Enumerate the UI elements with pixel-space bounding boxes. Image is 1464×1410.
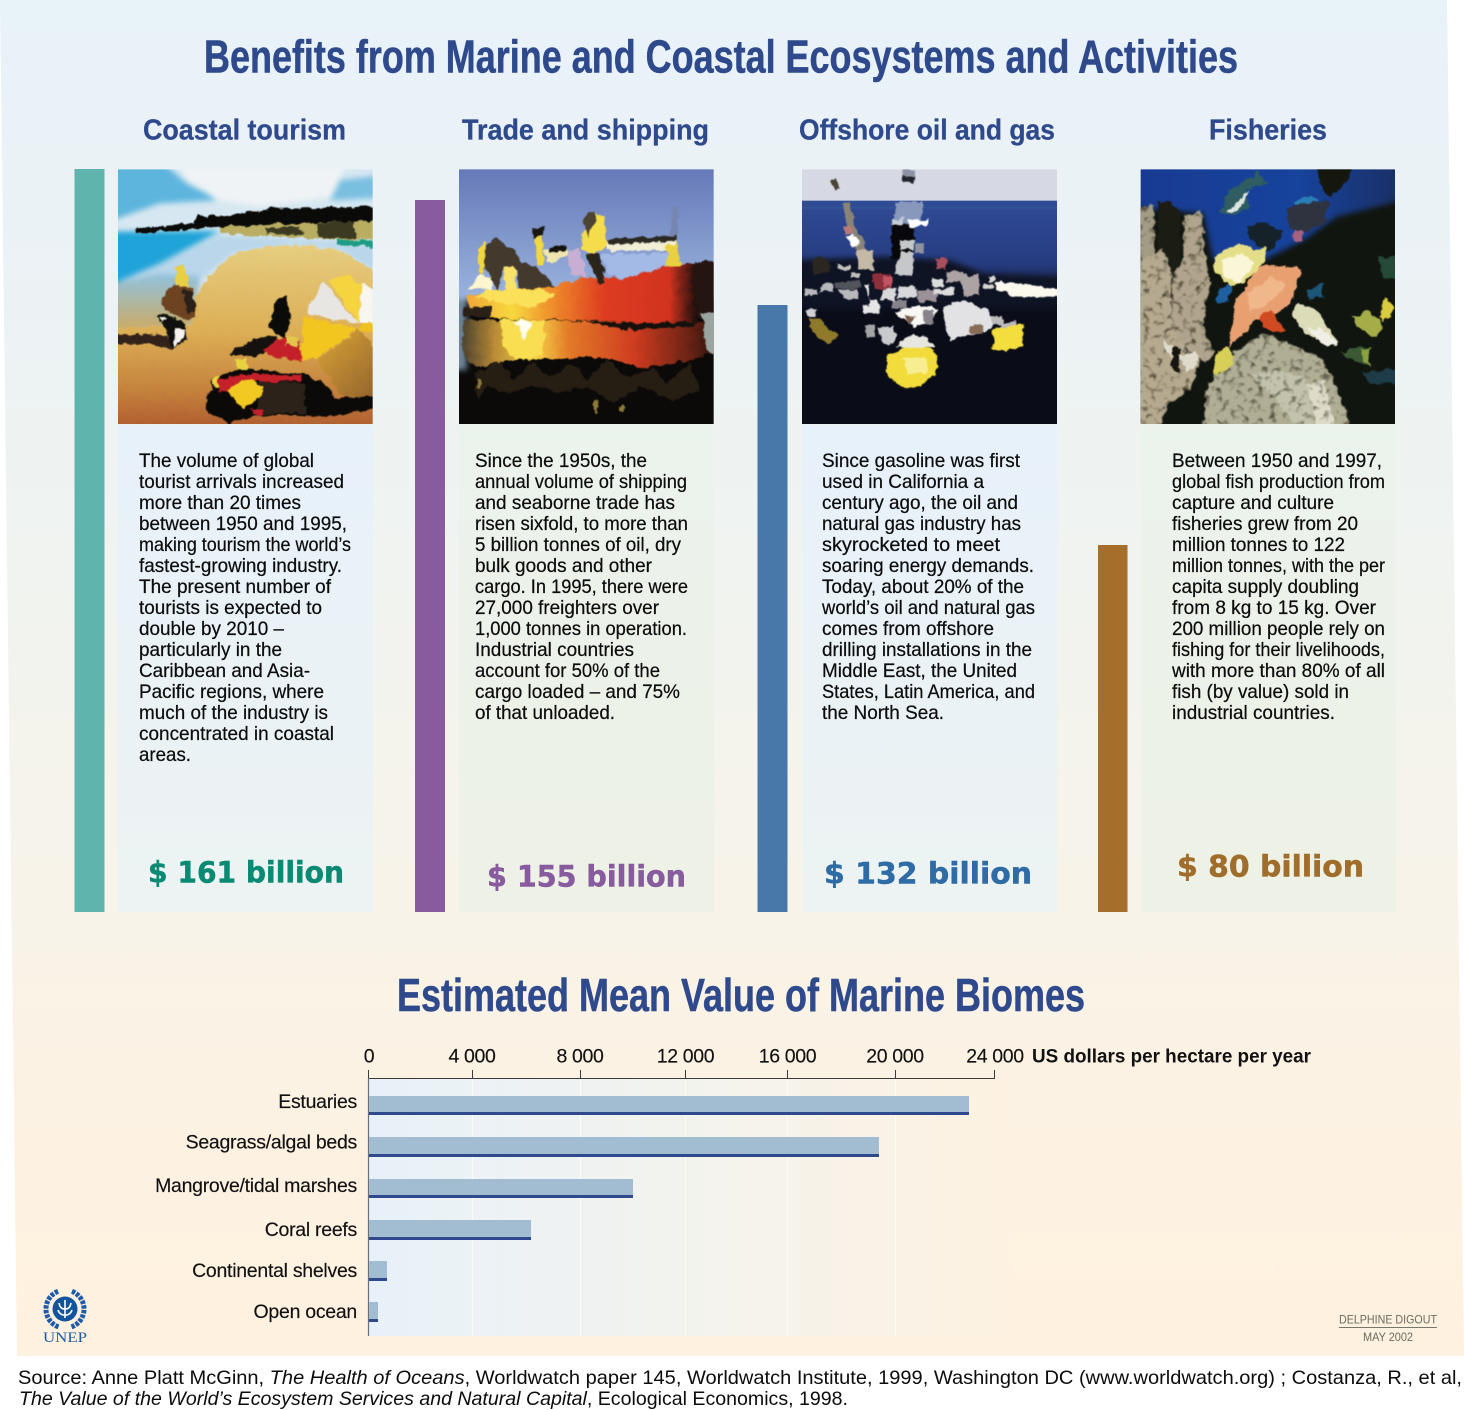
body text: offshore oil and gas: natural gas industry has xyxy=(822,513,1021,535)
body text: offshore oil and gas: Since gasoline was first xyxy=(822,450,1021,472)
panel: trade and shipping xyxy=(415,114,733,912)
body text: offshore oil and gas: Middle East, the United xyxy=(822,660,1017,682)
body text: offshore oil and gas: the North Sea. xyxy=(822,702,944,724)
bar: coral reefs xyxy=(265,1219,531,1241)
text panel background xyxy=(1141,425,1396,912)
illustration: oil platform xyxy=(802,169,1057,424)
body text: trade and shipping: risen sixfold, to more than xyxy=(475,513,688,535)
body text: trade and shipping: 5 billion tonnes of oil, dry xyxy=(475,534,681,556)
body text: fisheries: with more than 80% of all xyxy=(1171,660,1385,682)
body text: fisheries: million tonnes, with the per xyxy=(1172,555,1385,577)
panel: coastal tourism xyxy=(74,114,390,912)
source: Source: Anne Platt McGinn, The Health of Oceans , Worldwatch paper 145, Worldwatch Institute, 1999, Washington DC (www.worldwatch.org) ; Costanza, R., et al, xyxy=(18,1367,1462,1389)
body text: offshore oil and gas: comes from offshore xyxy=(822,618,994,640)
panel: fisheries xyxy=(1098,114,1417,912)
axis: x ticks and labels: 0 xyxy=(364,1046,375,1068)
body text: coastal tourism: more than 20 times xyxy=(139,492,301,514)
body text: trade and shipping: 27,000 freighters over xyxy=(475,597,659,619)
body text: offshore oil and gas: skyrocketed to meet xyxy=(822,534,1001,556)
body text: fisheries xyxy=(1171,450,1385,724)
body text: fisheries: global fish production from xyxy=(1172,471,1385,493)
bar: open ocean: Open ocean xyxy=(254,1301,357,1323)
bar: estuaries: Estuaries xyxy=(278,1091,358,1113)
body text: offshore oil and gas: century ago, the oil and xyxy=(822,492,1018,514)
body text: trade and shipping: annual volume of shipping xyxy=(475,471,687,493)
body text: coastal tourism: concentrated in coastal xyxy=(139,723,334,745)
body text: fisheries: 200 million people rely on xyxy=(1172,618,1385,640)
text panel background xyxy=(118,425,373,912)
axis: x ticks and labels: 12 000 xyxy=(657,1046,715,1068)
body text: trade and shipping: Industrial countries xyxy=(475,639,634,661)
heading: fisheries: Fisheries xyxy=(1209,114,1327,146)
body text: trade and shipping: cargo loaded – and 75% xyxy=(475,681,680,703)
source: The Value of the World’s Ecosystem Services and Natural Capital, Ecological Economics, 1998. xyxy=(19,1388,848,1410)
axis: x ticks and labels: 16 000 xyxy=(759,1046,817,1068)
body text: fisheries: capture and culture xyxy=(1172,492,1334,514)
bar: continental shelves: Continental shelves xyxy=(192,1260,358,1282)
body text: trade and shipping: cargo. In 1995, there were xyxy=(475,576,688,598)
bar: coral reefs: Coral reefs xyxy=(265,1219,358,1241)
value: coastal tourism: $ 161 billion xyxy=(148,856,344,890)
body text: fisheries: from 8 kg to 15 kg. Over xyxy=(1172,597,1376,619)
source xyxy=(18,1367,1462,1410)
value: offshore oil and gas: $ 132 billion xyxy=(824,856,1032,890)
body text: trade and shipping: bulk goods and other xyxy=(475,555,652,577)
bar: mangrove/tidal marshes: Mangrove/tidal marshes xyxy=(155,1175,358,1197)
body text: trade and shipping: and seaborne trade has xyxy=(475,492,675,514)
axis unit label: US dollars per hectare per year xyxy=(1032,1046,1311,1068)
credit: DELPHINE DIGOUT xyxy=(1339,1312,1438,1326)
axis: x ticks and labels xyxy=(364,1046,1024,1078)
illustration: ship xyxy=(459,169,714,424)
body text: coastal tourism: double by 2010 – xyxy=(139,618,284,640)
body text: coastal tourism: making tourism the world’s xyxy=(139,534,351,556)
axis: x ticks and labels: 4 000 xyxy=(448,1046,496,1068)
body text: fisheries: fishing for their livelihoods, xyxy=(1172,639,1385,661)
bar: seagrass/algal beds xyxy=(186,1132,879,1157)
icon: UNEP logo: UNEP xyxy=(43,1330,87,1346)
body text: coastal tourism: between 1950 and 1995, xyxy=(139,513,347,535)
illustration: reef fish xyxy=(1140,169,1395,424)
credit: MAY 2002 xyxy=(1363,1332,1413,1344)
body text: coastal tourism xyxy=(139,450,351,766)
bar chart: marine biomes xyxy=(155,1046,1311,1336)
body text: coastal tourism: Caribbean and Asia- xyxy=(139,660,310,682)
body text: coastal tourism: Pacific regions, where xyxy=(139,681,324,703)
value bar: coastal tourism xyxy=(74,169,104,912)
body text: offshore oil and gas xyxy=(821,450,1035,724)
value bar: fisheries xyxy=(1098,545,1128,912)
text panel background xyxy=(459,425,714,912)
heading: trade and shipping: Trade and shipping xyxy=(462,114,709,146)
body text: fisheries: Between 1950 and 1997, xyxy=(1172,450,1382,472)
body text: coastal tourism: areas. xyxy=(139,744,191,766)
illustration: beach xyxy=(118,169,373,424)
body text: fisheries: industrial countries. xyxy=(1172,702,1335,724)
credit xyxy=(1339,1312,1438,1344)
body text: fisheries: fisheries grew from 20 xyxy=(1172,513,1358,535)
body text: coastal tourism: The present number of xyxy=(139,576,332,598)
value bar: trade and shipping xyxy=(415,200,445,912)
panel: offshore oil and gas xyxy=(758,114,1077,912)
body text: coastal tourism: tourists is expected to xyxy=(139,597,322,619)
body text: offshore oil and gas: soaring energy demands. xyxy=(822,555,1034,577)
text panel background xyxy=(802,425,1057,912)
axis: x ticks and labels: 8 000 xyxy=(556,1046,604,1068)
body text: offshore oil and gas: drilling installations in the xyxy=(822,639,1032,661)
bar: estuaries xyxy=(278,1091,969,1115)
value bar: offshore oil and gas xyxy=(758,305,788,912)
body text: fisheries: fish (by value) sold in xyxy=(1172,681,1349,703)
body text: offshore oil and gas: States, Latin America, and xyxy=(822,681,1035,703)
body text: coastal tourism: fastest-growing industry. xyxy=(139,555,342,577)
body text: offshore oil and gas: world’s oil and natural gas xyxy=(821,597,1035,619)
heading: coastal tourism: Coastal tourism xyxy=(143,114,346,146)
body text: fisheries: capita supply doubling xyxy=(1172,576,1359,598)
heading: offshore oil and gas: Offshore oil and gas xyxy=(799,114,1055,146)
bar: mangrove/tidal marshes xyxy=(155,1175,633,1198)
body text: fisheries: million tonnes to 122 xyxy=(1172,534,1345,556)
body text: trade and shipping xyxy=(475,450,688,724)
body text: coastal tourism: particularly in the xyxy=(139,639,282,661)
axis: x ticks and labels: 20 000 xyxy=(866,1046,924,1068)
value: trade and shipping: $ 155 billion xyxy=(487,860,686,894)
body text: coastal tourism: The volume of global xyxy=(139,450,314,472)
body text: trade and shipping: account for 50% of the xyxy=(475,660,660,682)
axis: x ticks and labels: 24 000 xyxy=(966,1046,1024,1068)
icon: UNEP logo xyxy=(43,1291,87,1346)
body text: coastal tourism: tourist arrivals increased xyxy=(139,471,344,493)
value: fisheries: $ 80 billion xyxy=(1177,850,1364,884)
body text: trade and shipping: 1,000 tonnes in operation. xyxy=(475,618,687,640)
body text: trade and shipping: Since the 1950s, the xyxy=(475,450,647,472)
body text: coastal tourism: much of the industry is xyxy=(139,702,328,724)
body text: trade and shipping: of that unloaded. xyxy=(475,702,615,724)
bar: seagrass/algal beds: Seagrass/algal beds xyxy=(186,1132,358,1154)
body text: offshore oil and gas: used in California a xyxy=(822,471,984,493)
chart title: Estimated Mean Value of Marine Biomes xyxy=(397,969,1085,1021)
body text: offshore oil and gas: Today, about 20% of the xyxy=(822,576,1024,598)
